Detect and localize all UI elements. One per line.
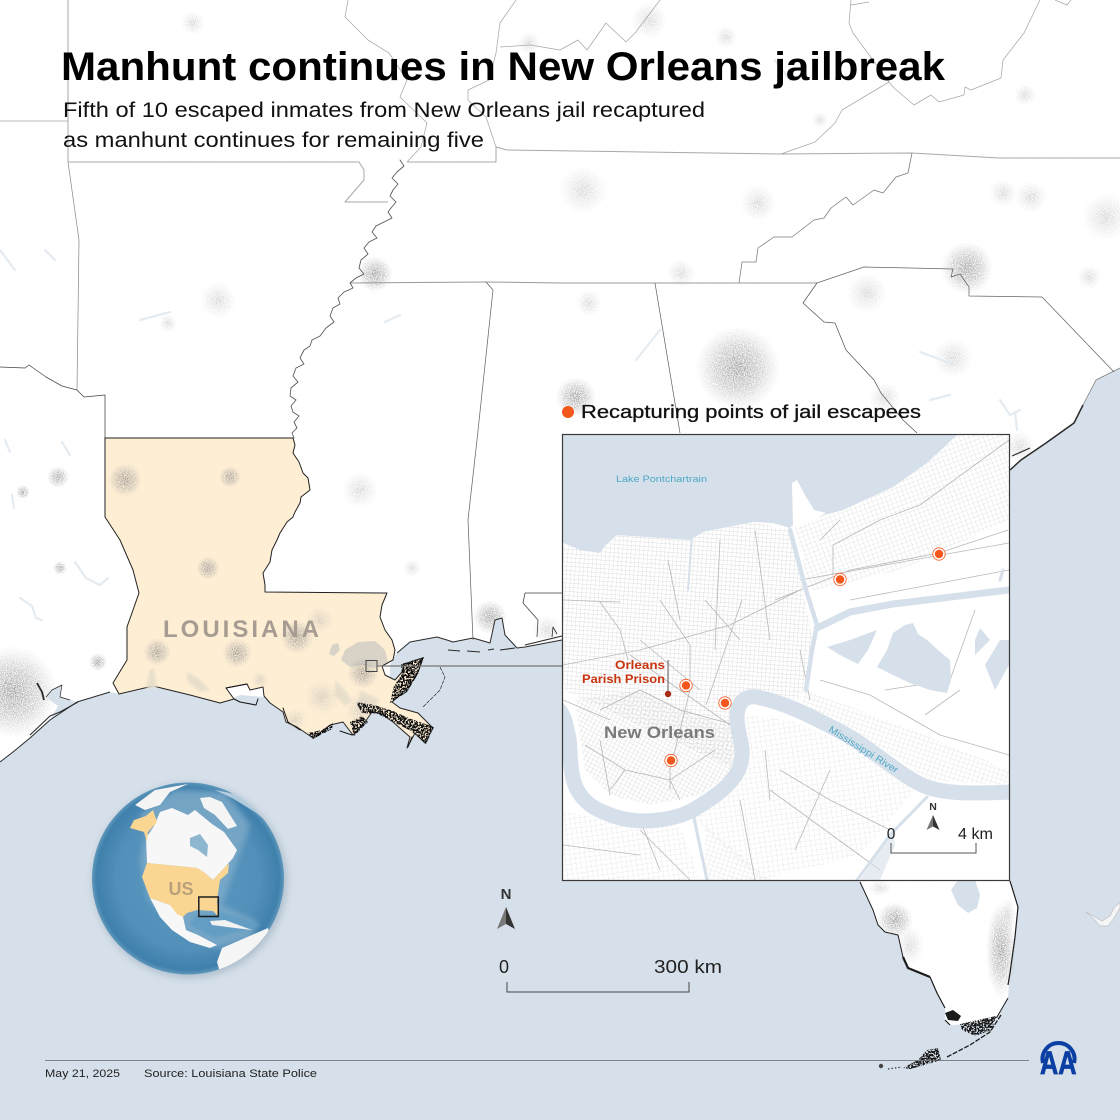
Florida peninsula details	[860, 880, 1018, 1069]
main north arrow	[497, 886, 515, 929]
subtitle: as manhunt continues for remaining five	[63, 128, 484, 152]
shallow water	[140, 790, 258, 948]
Mexico and Central America	[150, 898, 217, 948]
inset north arrow: N	[929, 801, 937, 813]
marsh coast	[308, 657, 434, 744]
state borders	[0, 0, 1120, 640]
Louisiana towns	[108, 463, 379, 732]
street grids	[563, 435, 1009, 880]
Lake Pontchartrain	[563, 435, 957, 553]
label: Mississippi River: Mississippi River	[826, 724, 900, 776]
Florida Bay islets and Keys	[903, 1016, 996, 1069]
inland water bodies	[0, 60, 1020, 620]
main scale bar: 0	[499, 957, 509, 977]
inset scale bar	[887, 826, 993, 853]
Alaska	[130, 810, 157, 842]
title: Manhunt continues in New Orleans jailbreak	[61, 45, 946, 89]
label: LOUISIANA: LOUISIANA	[163, 616, 319, 643]
Mississippi River border	[290, 160, 404, 438]
footer	[45, 1060, 1029, 1080]
South America and Caribbean	[217, 928, 268, 970]
Lake Pontchartrain on the state map	[341, 641, 388, 668]
locator square	[199, 897, 218, 916]
inset map: New Orleans	[555, 435, 1015, 880]
coastline detail	[0, 368, 1120, 762]
subtitle	[63, 98, 705, 152]
connector line to inset	[377, 665, 563, 667]
urban areas on the base map	[0, 2, 1120, 738]
prison marker with label: Parish Prison	[582, 672, 665, 686]
major roads	[563, 440, 1009, 880]
main scale bar: 300 km	[654, 957, 722, 977]
footer: May 21, 2025	[45, 1068, 120, 1080]
contiguous US	[142, 863, 229, 917]
locator square for New Orleans	[366, 660, 377, 672]
subtitle: Fifth of 10 escaped inmates from New Orleans jail recaptured	[63, 98, 705, 122]
inset scale bar: 4 km	[958, 826, 993, 843]
locator globe	[92, 782, 287, 978]
inset scale bar: 0	[887, 826, 896, 843]
inset north arrow	[926, 801, 940, 830]
footer: Source: Louisiana State Police	[144, 1068, 317, 1080]
ocean: Gulf of Mexico and Atlantic	[0, 368, 1120, 1120]
label: Lake Pontchartrain: Lake Pontchartrain	[616, 474, 707, 484]
prison marker with label	[582, 658, 671, 697]
label: US: US	[168, 879, 194, 899]
prison marker with label: Orleans	[615, 658, 665, 672]
Anadolu Agency logo: AA	[1040, 1045, 1076, 1081]
Louisiana state	[105, 438, 434, 748]
inset frame	[562, 434, 1010, 880]
Lake Okeechobee	[951, 880, 980, 913]
Mississippi River	[555, 697, 1015, 821]
Bahamas island	[1086, 902, 1120, 926]
main scale bar	[499, 957, 722, 992]
legend: recapturing points: Recapturing points of jail escapees	[581, 401, 921, 422]
recapture points	[665, 548, 945, 767]
Canada and Arctic	[146, 808, 237, 880]
main north arrow: N	[501, 886, 511, 903]
label: New Orleans: New Orleans	[604, 724, 715, 742]
canals and wetlands	[688, 530, 1009, 880]
